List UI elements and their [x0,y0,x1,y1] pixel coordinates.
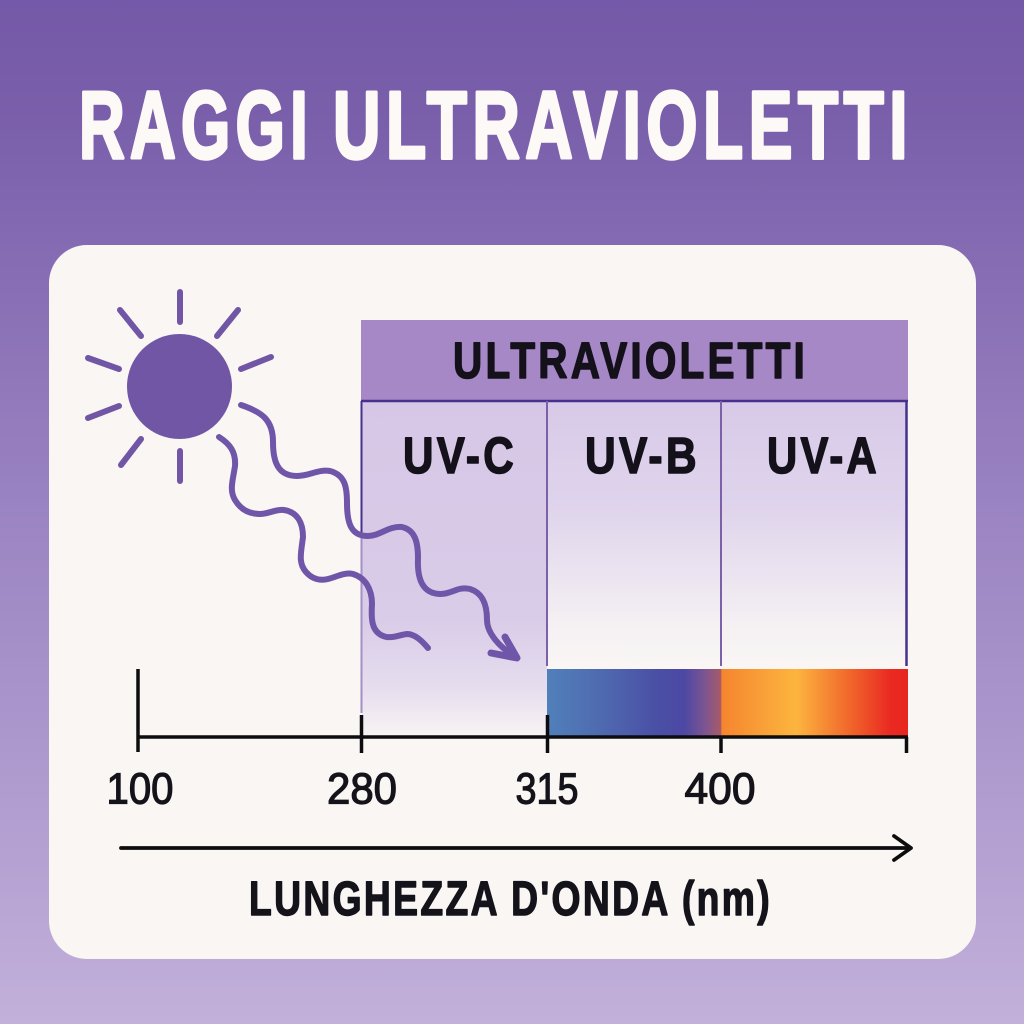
header: ultravioletti [361,320,908,401]
arrow: upper wavy ray [241,405,517,658]
tick label: 400: 400 [684,764,756,814]
arrow: lower wavy ray [219,437,428,648]
wavelength axis [138,669,908,753]
band dividers [361,401,908,713]
label: UV-B: UV-B [585,427,700,484]
tick label: 100: 100 [106,764,174,814]
label: UV-C: UV-C [403,427,517,484]
header: ultravioletti: ULTRAVIOLETTI [453,332,808,389]
panel: UV-C band [362,402,547,738]
panel: UV-A band [721,402,907,668]
spectrum bar [547,669,908,736]
panel: main card [49,245,976,959]
arrow: wavelength direction [121,836,911,860]
axis label: LUNGHEZZA D'ONDA (nm) [249,873,772,926]
title [79,72,913,179]
tick label: 315: 315 [516,764,578,814]
panel: UV-B band [547,402,721,668]
label: UV-A: UV-A [767,427,880,484]
tick label: 280: 280 [327,764,397,814]
title: RAGGI [79,72,313,179]
icon: sun [88,292,271,481]
